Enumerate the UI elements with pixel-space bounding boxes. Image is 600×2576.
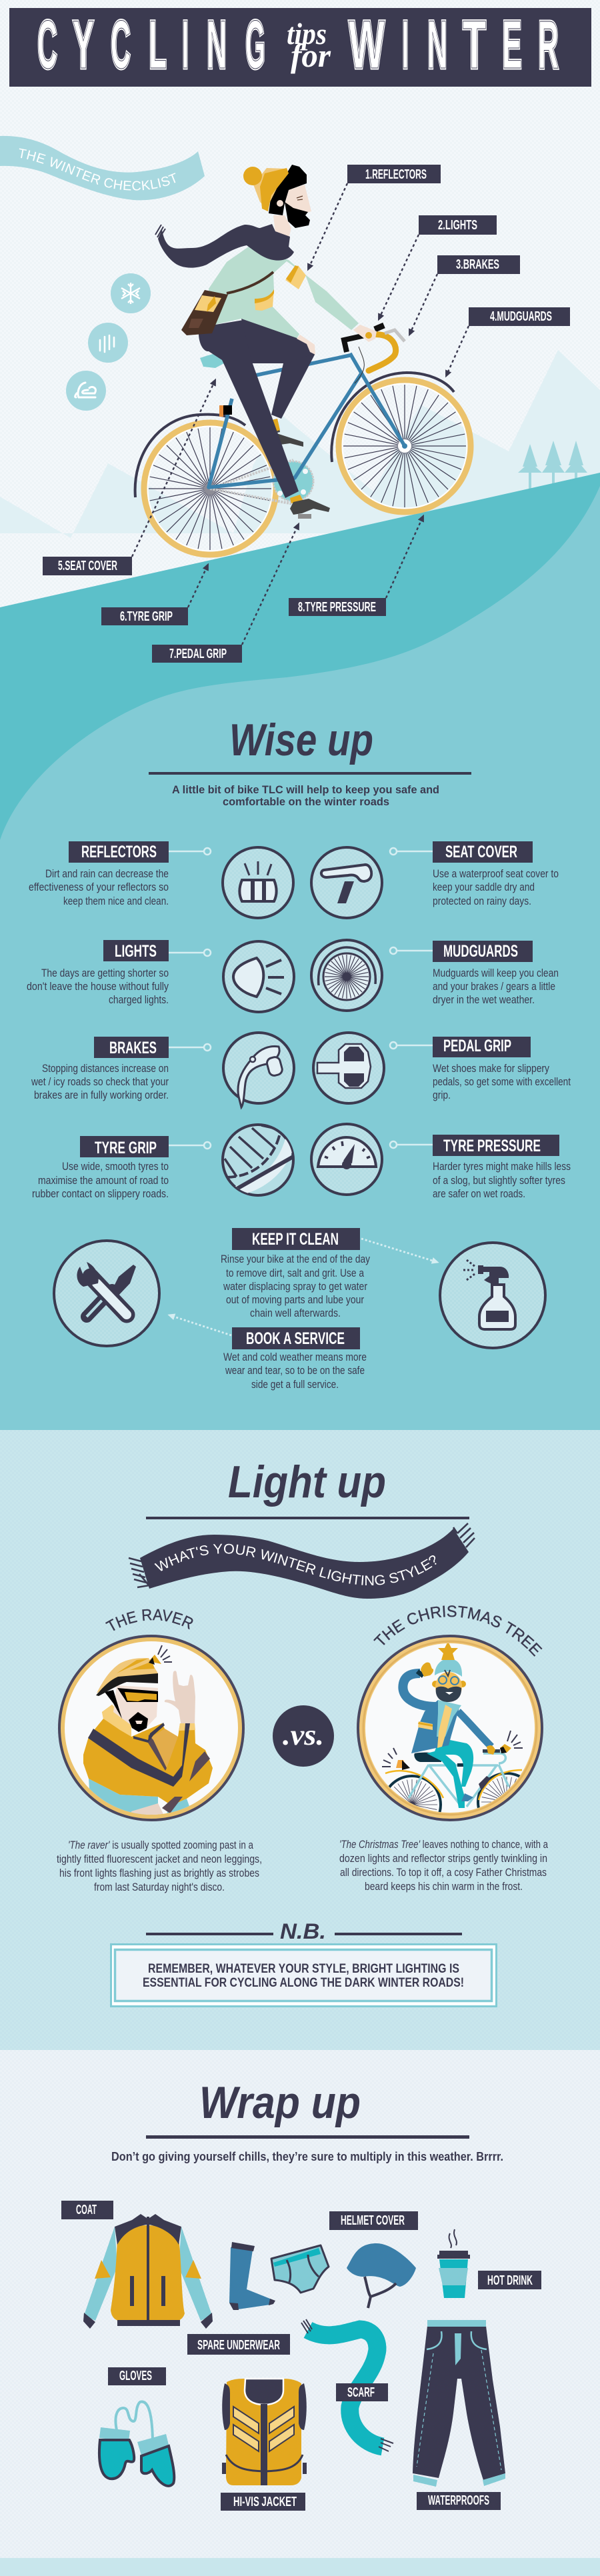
title: cycling: C: [37, 7, 57, 83]
text: the raver: [57, 1839, 262, 1893]
tip: seat cover: Use a waterproof seat cover to: [433, 867, 559, 880]
label 7: [152, 527, 297, 663]
brown panel: [189, 1751, 210, 1781]
item: scarf: [301, 2319, 393, 2451]
label 5: 5.SEAT COVER: [58, 558, 117, 573]
banner: what's your winter lighting style: WHAT'S YOUR WINTER LIGHTING STYLE?: [155, 1544, 437, 1585]
tip: reflectors: keep them nice and clean.: [63, 895, 169, 907]
item: hot drink: HOT DRINK: [487, 2273, 533, 2288]
item: waterproofs: WATERPROOFS: [428, 2493, 489, 2508]
title: cycling: C: [111, 7, 131, 83]
title banner: G: [245, 7, 265, 83]
tip: reflectors: effectiveness of your reflectors so: [29, 881, 169, 893]
tip: keep it clean: Rinse your bike at the end of the day: [221, 1253, 370, 1265]
far ankle and shoe: [272, 419, 303, 447]
title banner: R: [538, 7, 559, 83]
label 8: 8.TYRE PRESSURE: [298, 599, 376, 615]
label 3: [411, 255, 520, 332]
heading: wrap up: Wrap up: [199, 2077, 361, 2128]
title: winter: W: [349, 7, 385, 83]
callout: [111, 1944, 496, 2007]
title: winter: I: [402, 7, 409, 83]
title: cycling: L: [149, 7, 167, 83]
title banner: G: [245, 7, 265, 83]
callout: REMEMBER, WHATEVER YOUR STYLE, BRIGHT LIGHTING IS: [148, 1962, 459, 1976]
tip: mudguards: [390, 941, 559, 1006]
label 1: [309, 165, 441, 267]
tip: brakes: [31, 1037, 211, 1101]
title: tips for: [287, 17, 331, 74]
chest panel: [149, 1729, 178, 1768]
jacket: [83, 1705, 213, 1805]
dark stripe: [88, 1723, 190, 1787]
title: tips for: tips: [287, 17, 327, 51]
label 6: [101, 567, 207, 625]
scarf: [158, 224, 294, 268]
text: the christmas tree: [339, 1838, 548, 1893]
tip: seat cover: SEAT COVER: [445, 843, 517, 861]
title: cycling: L: [149, 7, 167, 83]
icon: pedal: [313, 1033, 384, 1103]
item: coat: [61, 2201, 213, 2329]
tip: tyre grip: Use wide, smooth tyres to: [62, 1160, 169, 1173]
icon: mudguard wheel: [311, 940, 382, 1011]
label 4: 4.MUDGUARDS: [490, 309, 552, 324]
icon: reflector: [223, 847, 293, 918]
tip: pedal grip: grip.: [433, 1089, 451, 1101]
tip: mudguards: and your brakes / gears a little: [433, 980, 555, 993]
tip: pedal grip: PEDAL GRIP: [443, 1037, 511, 1055]
arrow: to spray: [361, 1239, 435, 1261]
saddle: [200, 348, 258, 368]
tip: mudguards: MUDGUARDS: [443, 942, 518, 961]
tip: keep it clean: [221, 1228, 370, 1319]
tip: brakes: brakes are in fully working order.: [34, 1089, 169, 1101]
portrait: the raver: [59, 1636, 243, 1820]
rear wheel: [144, 423, 276, 555]
mountains: [0, 350, 600, 538]
title: cycling: C: [37, 7, 57, 83]
tip: tyre grip: rubber contact on slippery roads.: [32, 1187, 169, 1200]
tip: book a service: wear and tear, so to be on the safe: [225, 1364, 365, 1377]
tip: book a service: Wet and cold weather means more: [223, 1351, 367, 1363]
tip: lights: charged lights.: [109, 993, 169, 1006]
item: spare underwear: [187, 2245, 329, 2355]
tip: brakes: BRAKES: [109, 1039, 157, 1057]
label 2: 2.LIGHTS: [438, 217, 477, 233]
frame: [209, 353, 405, 487]
label: the christmas tree: THE CHRISTMAS TREE: [373, 1605, 543, 1657]
heading: n.b.: N.B.: [280, 1919, 326, 1943]
item: hot drink: [437, 2229, 541, 2298]
hands: [297, 325, 377, 355]
tip: keep it clean: KEEP IT CLEAN: [252, 1230, 339, 1249]
tip: seat cover: protected on rainy days.: [433, 895, 531, 907]
tip: keep it clean: chain well afterwards.: [250, 1307, 341, 1319]
title: winter: I: [402, 7, 409, 83]
item: helmet cover: HELMET COVER: [341, 2213, 405, 2228]
title: tips for: for: [291, 37, 331, 74]
label 6: 6.TYRE GRIP: [120, 609, 173, 624]
label 7: 7.PEDAL GRIP: [169, 646, 227, 661]
near shoe: [290, 495, 330, 519]
tip: brakes: Stopping distances increase on: [42, 1062, 169, 1075]
title: cycling: I: [182, 7, 189, 83]
text: the christmas tree: all directions. To top it off, a cosy Father Christmas: [340, 1866, 547, 1879]
label 1: 1.REFLECTORS: [365, 167, 427, 182]
title banner: R: [538, 7, 559, 83]
intro text: comfortable on the winter roads: [223, 795, 389, 808]
hat: [243, 167, 289, 211]
tip: tyre grip: maximise the amount of road to: [38, 1174, 169, 1187]
title: cycling: N: [207, 7, 227, 83]
item: gloves: [99, 2367, 174, 2486]
icon: pressure gauge: [311, 1124, 382, 1195]
handlebars: [344, 325, 405, 383]
text: the christmas tree: 'The Christmas Tree' leaves nothing to chance, with a: [339, 1838, 548, 1851]
intro text: [172, 783, 439, 808]
tip: lights: The days are getting shorter so: [41, 967, 169, 979]
text: the christmas tree: beard keeps his chin warm in the frost.: [365, 1880, 523, 1893]
title: winter: E: [502, 7, 522, 83]
tip: reflectors: Dirt and rain can decrease the: [45, 867, 169, 880]
item: scarf: SCARF: [347, 2385, 375, 2400]
sleeve patch: [162, 1797, 183, 1813]
tip: tyre pressure: Harder tyres might make hills less: [433, 1160, 571, 1173]
tip: tyre pressure: [390, 1135, 571, 1200]
icon: tyre tread: [223, 1125, 297, 1197]
tip: tyre grip: TYRE GRIP: [95, 1139, 157, 1157]
tip: reflectors: [29, 841, 211, 907]
title: winter: T: [463, 7, 486, 83]
title: winter: [349, 7, 559, 83]
text: the raver: his front lights flashing just as brightly as strobes: [59, 1867, 259, 1879]
thigh: [241, 319, 315, 363]
trees: [518, 441, 587, 490]
label 8: [289, 519, 422, 616]
banner: what's your winter lighting style: [128, 1523, 475, 1599]
blue undershirt: [89, 1779, 189, 1815]
title: winter: T: [463, 7, 486, 83]
title: winter: W: [349, 7, 385, 83]
tip: tyre pressure: TYRE PRESSURE: [443, 1137, 541, 1155]
arrows and labels: checklist: [43, 165, 570, 663]
text: the raver: tightly fitted fluorescent jacket and neon leggings,: [57, 1853, 262, 1865]
tip: keep it clean: water displacing spray to get water: [223, 1280, 367, 1293]
icon: wind: [66, 371, 106, 411]
label 2: [380, 215, 497, 317]
mudguards: [135, 373, 454, 497]
far leg: [233, 327, 315, 419]
tip: book a service: side get a full service.: [251, 1378, 339, 1391]
seat post and rear light: [219, 405, 232, 417]
tip: mudguards: Mudguards will keep you clean: [433, 967, 559, 979]
arrow: to tools: [172, 1316, 231, 1335]
icon: saddle: [311, 847, 382, 918]
title: winter: N: [427, 7, 447, 83]
title: winter: E: [502, 7, 522, 83]
hero background: [0, 0, 600, 733]
hair and beard: [269, 165, 310, 228]
title: cycling: Y: [73, 7, 94, 83]
item: helmet cover: [329, 2211, 418, 2308]
front wheel: [339, 380, 471, 512]
item: hi-vis jacket: [221, 2379, 307, 2511]
helmet: [97, 1658, 158, 1693]
lamp: [149, 1655, 161, 1664]
bag: [181, 272, 273, 335]
tip: lights: LIGHTS: [115, 942, 157, 961]
face: [285, 185, 311, 213]
icon: light: [223, 941, 294, 1012]
section background: wrap up: [0, 2050, 600, 2558]
item: coat: COAT: [76, 2202, 97, 2217]
tip: book a service: [223, 1327, 367, 1391]
tip: pedal grip: Wet shoes make for slippery: [433, 1062, 549, 1075]
icon: tools: [54, 1241, 159, 1346]
title: cycling: Y: [73, 7, 94, 83]
tip: keep it clean: to remove dirt, salt and grit. Use a: [226, 1267, 364, 1279]
tip: tyre pressure: of a slog, but slightly softer tyres: [433, 1174, 565, 1187]
strap: [105, 1690, 122, 1719]
ribbon: the winter checklist: [0, 136, 205, 200]
goatee: [129, 1712, 148, 1732]
section background: wise up: [0, 486, 600, 1430]
label 4: [447, 307, 570, 373]
arm bands: [255, 265, 306, 311]
item: spare underwear: SPARE UNDERWEAR: [197, 2337, 280, 2353]
ribbon: the winter checklist: THE WINTER CHECKLIST: [19, 148, 176, 191]
raised hand: [165, 1671, 195, 1727]
ground slope: [0, 473, 600, 867]
chain and chainring: [210, 460, 313, 504]
title: cycling: C: [111, 7, 131, 83]
title: cycling: I: [182, 7, 189, 83]
heading: light up: Light up: [228, 1457, 386, 1507]
face: [113, 1685, 158, 1732]
icon: snowflake: [111, 273, 151, 313]
intro text: wrap up: Don’t go giving yourself chills, they’re sure to multiply in this weather. Brrrr.: [111, 2150, 503, 2163]
vs badge: .vs.: [283, 1719, 324, 1751]
tip: keep it clean: out of moving parts and lube your: [226, 1293, 364, 1306]
section background: light up: [0, 1430, 600, 2050]
tip: seat cover: [390, 841, 559, 907]
tip: tyre grip: [32, 1136, 211, 1200]
title: cycling: [37, 7, 265, 83]
tip: book a service: BOOK A SERVICE: [246, 1329, 345, 1348]
collar: [102, 1705, 131, 1737]
title banner: [9, 7, 591, 87]
text: the raver: 'The raver' is usually spotted zooming past in a: [68, 1839, 253, 1851]
portrait: the christmas tree: [358, 1636, 542, 1833]
item: sock: [229, 2242, 275, 2310]
tip: lights: [27, 940, 211, 1006]
tip: lights: don't leave the house without fully: [27, 980, 169, 993]
item: waterproofs: [413, 2320, 505, 2510]
label: the raver: THE RAVER: [105, 1609, 193, 1631]
icon: rain: [88, 323, 128, 363]
tip: pedal grip: [390, 1037, 571, 1101]
label 5: [43, 383, 214, 575]
footer band: [0, 2558, 600, 2576]
vs badge: [273, 1705, 334, 1767]
label 3: 3.BRAKES: [456, 257, 499, 272]
illustration: cyclist on bike: [135, 165, 471, 555]
tip: seat cover: keep your saddle dry and: [433, 881, 535, 893]
text: the raver: from last Saturday night's disco.: [94, 1881, 225, 1893]
sweater: [209, 247, 359, 339]
tip: reflectors: REFLECTORS: [81, 843, 157, 861]
title: cycling: N: [207, 7, 227, 83]
icon: spray bottle: [440, 1243, 545, 1348]
title: winter: N: [427, 7, 447, 83]
item: hi-vis jacket: HI-VIS JACKET: [233, 2494, 297, 2509]
glasses: [117, 1688, 158, 1702]
callout: ESSENTIAL FOR CYCLING ALONG THE DARK WINTER ROADS!: [143, 1976, 464, 1990]
icon: brake lever: [223, 1033, 294, 1107]
text: the christmas tree: dozen lights and reflector strips gently twinkling in: [339, 1852, 547, 1865]
neck: [273, 215, 291, 239]
skin forearm: [131, 1803, 163, 1815]
tip: mudguards: dryer in the wet weather.: [433, 993, 535, 1006]
intro text: A little bit of bike TLC will help to keep you safe and: [172, 783, 439, 796]
item: gloves: GLOVES: [119, 2368, 152, 2383]
tip: brakes: wet / icy roads so check that your: [31, 1075, 169, 1088]
heading: n.b.: [146, 1919, 462, 1943]
near leg: [199, 320, 299, 498]
heading: wise up: Wise up: [229, 715, 373, 765]
tip: tyre pressure: are safer on wet roads.: [433, 1187, 525, 1200]
